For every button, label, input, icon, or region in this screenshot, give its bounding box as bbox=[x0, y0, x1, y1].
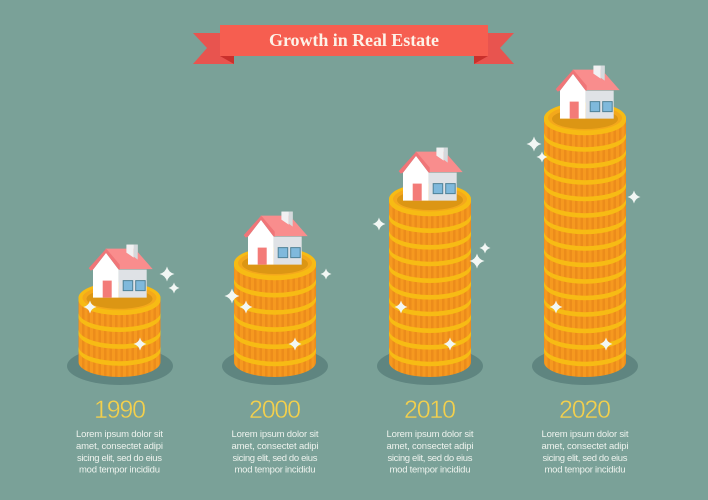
icon: house bbox=[89, 245, 153, 298]
description: sicing elit, sed do eius bbox=[542, 453, 628, 464]
description: amet, consectet adipi bbox=[542, 441, 628, 452]
icon: house bbox=[399, 148, 463, 201]
shadow bbox=[377, 347, 483, 385]
description bbox=[542, 429, 629, 476]
column: 2000 bbox=[222, 212, 332, 476]
year: 1990 bbox=[94, 396, 146, 424]
year: 2000 bbox=[249, 396, 301, 424]
year: 2020 bbox=[559, 396, 611, 424]
description: amet, consectet adipi bbox=[232, 441, 318, 452]
description bbox=[232, 429, 319, 476]
description: Lorem ipsum dolor sit bbox=[386, 429, 474, 440]
description: sicing elit, sed do eius bbox=[77, 453, 162, 464]
description: Lorem ipsum dolor sit bbox=[232, 429, 319, 440]
coin stack bbox=[544, 102, 626, 377]
description bbox=[386, 429, 474, 476]
coin stack bbox=[234, 248, 316, 377]
description: amet, consectet adipi bbox=[386, 441, 474, 452]
shadow bbox=[67, 347, 173, 385]
description: mod tempor incididu bbox=[390, 464, 470, 476]
description: Lorem ipsum dolor sit bbox=[542, 429, 629, 440]
description bbox=[76, 429, 163, 476]
description: Lorem ipsum dolor sit bbox=[76, 429, 163, 440]
shadow bbox=[532, 347, 638, 385]
sparkles bbox=[526, 136, 640, 350]
column: 2010 bbox=[372, 148, 490, 476]
coin stack bbox=[389, 184, 471, 377]
sparkles bbox=[224, 268, 332, 350]
ribbon banner bbox=[193, 25, 514, 64]
description: mod tempor incididu bbox=[79, 464, 160, 476]
description: sicing elit, sed do eius bbox=[232, 453, 318, 464]
description: mod tempor incididu bbox=[234, 464, 316, 476]
description: sicing elit, sed do eius bbox=[388, 453, 473, 464]
column: 2020 bbox=[526, 66, 640, 475]
coin stack bbox=[78, 282, 160, 377]
shadow bbox=[222, 347, 328, 385]
icon: house bbox=[556, 66, 620, 119]
year: 2010 bbox=[404, 396, 456, 424]
description: amet, consectet adipi bbox=[76, 441, 163, 452]
sparkles bbox=[372, 218, 490, 350]
title: Growth in Real Estate bbox=[269, 30, 439, 50]
sparkles bbox=[84, 266, 180, 350]
column: 1990 bbox=[67, 245, 180, 476]
icon: house bbox=[244, 212, 308, 265]
description: mod tempor incididu bbox=[544, 464, 626, 476]
